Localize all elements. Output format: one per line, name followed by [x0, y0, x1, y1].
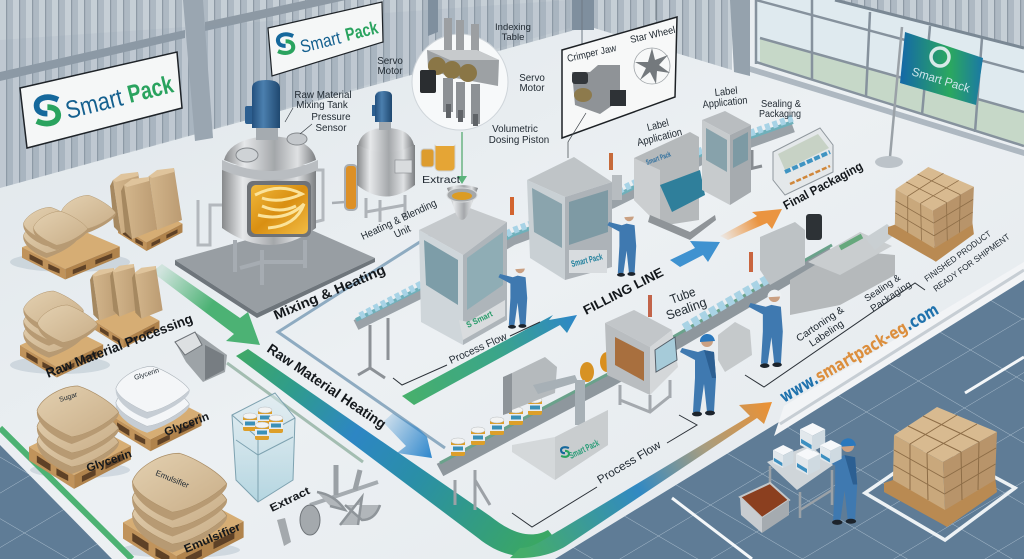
website url: www.smartpack-eg.com — [776, 300, 942, 407]
arrow: blue upper — [670, 241, 720, 267]
heading: mixing and heating: Mixing & Heating — [271, 262, 388, 323]
heading: final packaging: Final Packaging — [781, 159, 865, 213]
label: volumetric dosing piston — [489, 124, 549, 146]
sugar bags: Sugar — [58, 391, 79, 404]
label: pressure sensor: Sensor — [315, 123, 347, 134]
label: heating and blending unit: Heating & Blending — [359, 197, 439, 243]
label: sealing and packaging — [759, 98, 801, 120]
floor shadows — [10, 252, 240, 558]
sugar bags — [29, 386, 131, 489]
process band: finished route arrow — [510, 402, 772, 558]
filler machine one — [419, 185, 514, 345]
label: glycerin two: Glycerin — [163, 411, 211, 439]
jars on conveyor — [451, 342, 634, 456]
process band: raw material heating — [236, 349, 560, 556]
label: tube sealing: Sealing — [664, 294, 708, 323]
lower conveyor — [440, 245, 832, 510]
filler machine two — [527, 153, 622, 280]
poster: crimper jaw and star wheel: Star Wheel — [629, 25, 676, 46]
raw material: sugar pile two — [20, 264, 163, 378]
flag: Smart Pack — [910, 64, 973, 96]
sign: smart pack large: Pack — [125, 71, 176, 109]
label: label application one: Application — [636, 126, 683, 149]
label: volumetric dosing piston: Volumetric — [492, 124, 538, 135]
sign: smart pack large — [20, 52, 182, 148]
label: servo motor right: Servo — [519, 73, 545, 84]
arrow: orange upper — [720, 209, 782, 240]
label: extract lower: Extract — [268, 485, 312, 515]
arrow: dosing to extract — [457, 132, 467, 184]
mixer paddles — [277, 465, 380, 546]
arrow: filling line — [402, 315, 577, 405]
tile floor bottom right — [555, 262, 1024, 559]
label: indexing table: Indexing — [495, 22, 531, 33]
tile floor bottom left — [0, 445, 112, 559]
packing table with cartons — [767, 423, 842, 518]
emulsifier bags: Emulsifier — [154, 469, 190, 490]
label: label application one — [636, 117, 683, 149]
label: raw material mixing tank — [285, 90, 352, 122]
label: label application two — [702, 85, 748, 111]
end of line cartoner group — [749, 214, 897, 315]
label: sealing and packaging lower: Packaging — [869, 279, 914, 314]
arrow: green to mixing — [152, 264, 260, 345]
label: servo motor right: Motor — [519, 83, 545, 94]
label: process flow lower: Process Flow — [595, 439, 664, 487]
final packaging display box — [773, 128, 833, 195]
label: glycerin one: Glycerin — [85, 448, 133, 475]
control unit — [718, 322, 752, 372]
label: servo motor right — [519, 73, 545, 94]
machine logo: filler one: S Smart — [464, 308, 494, 330]
extract jars — [421, 140, 455, 171]
label: servo motor left: Motor — [377, 66, 403, 77]
heading: filling line: FILLING LINE — [581, 264, 666, 318]
heating and blending unit tank — [332, 91, 415, 222]
capper machine: Smart Pack — [567, 438, 601, 462]
label: process flow upper: Process Flow — [447, 330, 509, 367]
filler machine two: Smart Pack — [570, 251, 604, 269]
flag — [875, 27, 983, 168]
pallet of cartons bottom — [884, 407, 997, 527]
steel pillar — [183, 0, 213, 141]
label: pressure sensor: Pressure — [311, 112, 351, 123]
inspection machine — [605, 295, 678, 412]
sign: smart pack large: Smart — [63, 84, 126, 125]
poster: crimper jaw and star wheel — [562, 0, 677, 158]
label: sealing and packaging lower: Sealing & — [863, 272, 903, 304]
label: sealing and packaging lower — [863, 272, 914, 314]
sign: smart pack small — [268, 2, 383, 76]
small label text on white bag: Glycerin — [133, 367, 160, 382]
label: emulsifier: Emulsifier — [182, 521, 243, 556]
main mixing tank — [198, 80, 323, 285]
label: tube sealing: Tube — [668, 284, 697, 307]
green guide line left — [0, 428, 132, 559]
sign: smart pack small: Pack — [343, 17, 381, 45]
label: label application two: Label — [714, 85, 738, 99]
poster: crimper jaw and star wheel: Crimper Jaw — [566, 43, 618, 65]
label: label application one: Label — [646, 117, 670, 134]
label application machine: Smart Pack — [645, 149, 673, 167]
label: raw material mixing tank: Raw Material — [294, 90, 352, 101]
label: finished product ready for shipment: FINISHED PRODUCT — [922, 229, 993, 284]
label: finished product ready for shipment: READY FOR SHIPMENT — [931, 231, 1012, 294]
heading: raw material processing: Raw Material Processing — [44, 311, 195, 381]
label: label application two: Application — [702, 94, 748, 111]
label: extract: Extract — [422, 175, 460, 186]
label: indexing table — [495, 22, 531, 43]
label: pressure sensor — [300, 112, 351, 134]
label application machine — [634, 132, 716, 240]
conveyor upper filling line — [356, 118, 793, 378]
label: servo motor left — [377, 56, 403, 77]
workers — [498, 211, 857, 525]
label: volumetric dosing piston: Dosing Piston — [489, 135, 549, 146]
process bracket lines — [393, 283, 925, 527]
label: heating and blending unit: Unit — [392, 223, 413, 241]
steel pillar right — [730, 0, 750, 76]
steel base plate — [175, 225, 375, 318]
label: cartoning and labeling: Labeling — [808, 319, 846, 349]
sign: smart pack small: Smart — [298, 28, 343, 57]
raw material: rear sacks — [22, 168, 182, 280]
pallet of cartons top — [888, 167, 974, 262]
capper machine — [503, 357, 608, 480]
back wall left — [0, 0, 582, 188]
glass display box — [232, 393, 295, 502]
white glycerin bags — [110, 366, 202, 451]
bin of material — [740, 483, 789, 533]
arrow: blue heating — [383, 413, 432, 458]
sealing packaging machine — [702, 111, 751, 205]
emulsifier bags — [123, 453, 244, 559]
back wall right — [428, 0, 732, 70]
label: raw material mixing tank: Mixing Tank — [296, 100, 348, 111]
callout: dosing piston detail — [412, 18, 508, 130]
faint guide line — [227, 363, 363, 462]
label: servo motor left: Servo — [377, 56, 403, 67]
label: sealing and packaging: Packaging — [759, 108, 801, 120]
small roller machine — [175, 332, 227, 382]
label: cartoning and labeling: Cartoning & — [795, 304, 847, 344]
label: indexing table: Table — [502, 32, 524, 43]
blue grey guide lines — [278, 226, 445, 448]
warehouse windows — [750, 0, 1024, 156]
label: sealing and packaging: Sealing & — [761, 98, 801, 110]
heading: raw material heating: Raw Material Heating — [264, 340, 389, 432]
